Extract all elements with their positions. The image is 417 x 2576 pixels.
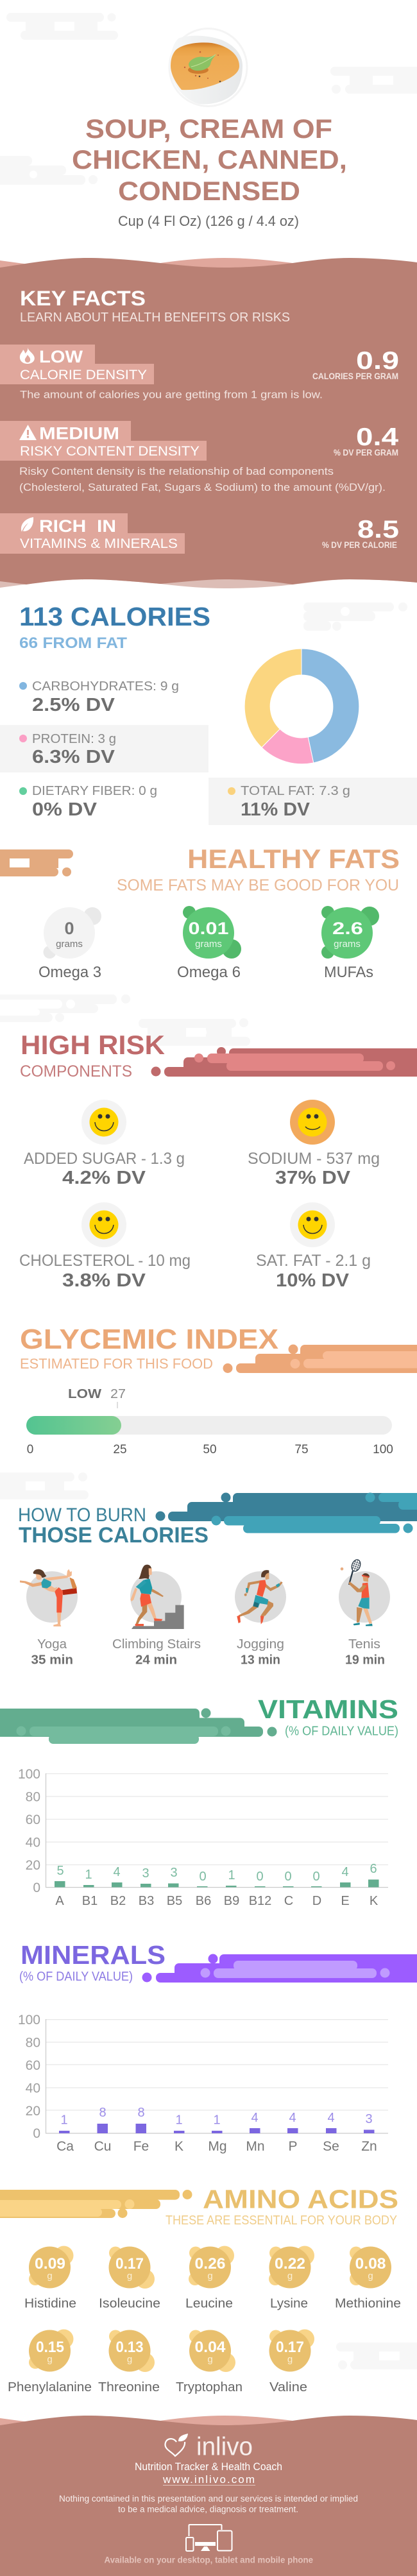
activity: tennis [339,1558,390,1667]
amino acid: methionine: Methionine [335,2297,401,2311]
fat: MUFAs [321,906,379,981]
minerals heading: (% OF DAILY VALUE) [19,1970,133,1984]
value labels: 0 [199,1870,207,1884]
icon: tennis figure [341,1558,373,1626]
amino acid: phenylalanine: 0.15 [36,2339,64,2356]
category labels: A [55,1894,64,1908]
icon: yoga figure [20,1569,77,1626]
logo: inlivo: inlivo [196,2433,253,2461]
amino acids heading [166,2184,398,2228]
category labels: Cu [94,2139,111,2154]
category labels: Mg [208,2139,227,2154]
y axis labels [18,2013,40,2141]
calories heading [19,602,210,652]
basil leaf [189,54,216,71]
minerals decoration [142,1954,417,1983]
value labels: 4 [341,1865,349,1879]
category labels: B2 [110,1894,126,1908]
amino acid: lysine [269,2246,314,2311]
macro: protein [19,732,116,767]
amino acid: histidine: Histidine [24,2297,76,2311]
category labels: B1 [82,1894,98,1908]
glycemic index gauge [26,1387,393,1456]
glycemic index gauge: 50 [203,1443,217,1456]
amino acid: methionine: 0.08 [355,2255,386,2273]
icon: smiley [90,1210,118,1240]
fact: medium risky content density: RISKY CONTENT DENSITY [20,444,200,459]
fat: omega 6: Omega 6 [177,964,241,981]
category labels: C [284,1894,293,1908]
icon: devices [186,2525,232,2551]
amino acids decoration [0,2190,192,2218]
footer fill [0,2416,417,2576]
macro: dietary fiber: DIETARY FIBER: 0 g [32,784,157,798]
macro: protein: 6.3% DV [32,747,115,767]
donut chart [244,649,359,764]
activity: climbing stairs: Climbing Stairs [112,1637,201,1651]
category labels: Zn [361,2139,377,2154]
fact: low calorie density: CALORIE DENSITY [20,368,147,382]
activity: climbing stairs [112,1565,201,1667]
amino acid: histidine: 0.09 [35,2255,65,2273]
amino acid: tryptophan: 0.04 [195,2339,226,2356]
amino acid: threonine: g [127,2354,132,2365]
vitamins heading: VITAMINS [258,1694,398,1724]
amino acid: tryptophan [176,2330,243,2394]
fact: low calorie density: CALORIES PER GRAM [312,371,398,381]
value labels: 8 [137,2106,145,2120]
activity: yoga: Yoga [37,1637,67,1651]
category labels: B9 [224,1894,239,1908]
amino acid: threonine [98,2330,160,2394]
value labels: 3 [142,1866,149,1881]
activity: jogging [235,1570,286,1667]
amino acid: isoleucine [99,2247,160,2311]
macro: total fat [228,784,350,820]
value labels: 4 [327,2111,335,2125]
key facts heading [20,287,290,325]
bars [59,2124,375,2133]
y axis labels: 100 [18,2013,40,2027]
key facts heading: KEY FACTS [20,287,146,310]
fact: rich in vitamins and minerals [0,513,399,554]
disclaimer [59,2494,358,2514]
amino acid: valine [269,2329,314,2394]
value labels: 1 [175,2113,183,2128]
amino acid: lysine: Lysine [270,2297,308,2311]
tagline: Nutrition Tracker & Health Coach [135,2461,282,2473]
minerals heading: MINERALS [21,1940,166,1970]
category labels: B6 [196,1894,211,1908]
risk: cholesterol: 3.8% DV [62,1270,146,1291]
activity: jogging: Jogging [237,1637,284,1651]
glycemic index gauge: 75 [294,1443,309,1456]
icon: smiley [90,1107,118,1137]
logo: inlivo [165,2433,253,2461]
glycemic index gauge: 25 [113,1443,127,1456]
glycemic index heading: ESTIMATED FOR THIS FOOD [20,1356,213,1372]
category labels: B3 [139,1894,154,1908]
y axis labels [18,1767,40,1895]
icon: smiley [298,1107,327,1137]
macro: total fat: TOTAL FAT: 7.3 g [241,784,350,798]
category labels: E [341,1894,350,1908]
amino acid: phenylalanine: Phenylalanine [8,2380,92,2394]
value labels: 0 [312,1870,320,1884]
activity: climbing stairs: 24 min [135,1653,177,1667]
icon: stairs figure [130,1565,184,1629]
icon: leaf [21,517,33,532]
value labels: 1 [85,1868,92,1882]
amino acid: isoleucine: Isoleucine [99,2297,160,2311]
high risk decoration [151,1047,417,1077]
healthy fats heading: SOME FATS MAY BE GOOD FOR YOU [117,876,399,894]
fact: low calorie density: LOW [39,347,83,366]
value labels: 1 [60,2113,68,2128]
fat: omega 3: 0 [64,919,74,938]
high risk heading: HIGH RISK [21,1030,165,1060]
category labels: Se [323,2139,339,2154]
serving size: Cup (4 Fl Oz) (126 g / 4.4 oz) [118,213,299,229]
fact: medium risky content density: 0.4 [356,423,398,451]
title [72,114,347,206]
fact: rich in vitamins and minerals: RICH IN [39,516,116,536]
fact: medium risky content density: Risky Content density is the relationship of bad components [19,465,334,477]
soup surface [171,42,239,90]
amino acid: valine: 0.17 [276,2339,304,2356]
value labels: 8 [99,2106,106,2120]
risk: cholesterol [19,1202,191,1291]
fact: low calorie density: The amount of calories you are getting from 1 gram is low. [20,389,323,400]
value labels: 5 [56,1864,64,1878]
y axis labels: 80 [26,1790,40,1804]
high risk heading [20,1030,165,1080]
category labels: D [312,1894,321,1908]
y axis labels: 0 [33,2126,40,2141]
category labels [56,2139,377,2154]
y axis labels: 100 [18,1767,40,1782]
y axis labels: 40 [26,2081,40,2095]
risk: sodium: SODIUM - 537 mg [248,1150,380,1168]
bowl body [170,36,243,104]
bar chart: minerals [18,2013,388,2154]
high risk heading: COMPONENTS [20,1062,132,1080]
macro: carbohydrates [19,679,179,715]
healthy fats decoration [0,849,73,876]
disclaimer: to be a medical advice, diagnosis or treatment. [118,2505,298,2514]
activity: tennis: Tenis [348,1637,380,1651]
amino acid: leucine: 0.26 [195,2255,226,2273]
fat: MUFAs: 2.6 [332,919,363,938]
category labels: Fe [133,2139,149,2154]
risk: sodium: 37% DV [275,1168,351,1188]
fat: MUFAs: grams [334,939,361,950]
bar chart: vitamins [18,1767,388,1908]
value labels [60,2106,373,2128]
fact: rich in vitamins and minerals: 8.5 [357,516,399,543]
risk: added sugar: 4.2% DV [62,1168,146,1188]
soup bowl photo [169,28,247,107]
value labels: 4 [289,2111,296,2125]
macro: carbohydrates: 2.5% DV [32,695,115,715]
amino acids heading: THESE ARE ESSENTIAL FOR YOUR BODY [166,2213,397,2228]
category labels: K [174,2139,183,2154]
glycemic index decoration [223,1345,417,1373]
panel fill [0,258,417,584]
glycemic index gauge: 0 [27,1443,33,1456]
fact: rich in vitamins and minerals: % DV PER CALORIE [322,540,397,550]
amino acid: leucine: g [207,2271,213,2282]
disclaimer: Nothing contained in this presentation and our services is intended or implied [59,2494,358,2503]
icon: flame [20,347,35,364]
activity: jogging: 13 min [241,1653,280,1667]
key facts heading: LEARN ABOUT HEALTH BENEFITS OR RISKS [20,311,290,325]
category labels: P [288,2139,298,2154]
activity: tennis: 19 min [345,1653,385,1667]
top pale wave [0,258,293,276]
glycemic index gauge: 27 [110,1387,126,1401]
amino acid: valine: g [287,2354,293,2365]
fat: omega 6: grams [195,939,222,950]
fact: medium risky content density: (Cholesterol, Saturated Fat, Sugars & Sodium) to the amount (%DV/gr). [19,481,386,493]
risk: added sugar [24,1100,185,1188]
fact: medium risky content density: MEDIUM [39,423,119,443]
glycemic index gauge: LOW [68,1387,101,1401]
amino acid: histidine: g [47,2271,53,2282]
amino acid: threonine: 0.13 [115,2339,144,2356]
value labels: 3 [170,1866,178,1880]
fat: omega 3: Omega 3 [38,964,101,981]
amino acid: valine: Valine [269,2380,307,2394]
macro: total fat: 11% DV [241,799,311,820]
y axis labels: 40 [26,1835,40,1850]
fact: low calorie density [0,345,399,400]
risk: cholesterol: CHOLESTEROL - 10 mg [19,1252,191,1270]
y axis labels: 0 [33,1881,40,1895]
fact: medium risky content density [0,421,398,493]
value labels: 6 [370,1862,377,1876]
glycemic index heading: GLYCEMIC INDEX [20,1324,278,1355]
icon: jogging figure [237,1570,283,1625]
value labels: 0 [256,1870,264,1884]
macro: carbohydrates: CARBOHYDRATES: 9 g [32,679,179,694]
burn calories heading: THOSE CALORIES [19,1523,208,1548]
risk: saturated fat: 10% DV [276,1270,350,1291]
y axis labels: 80 [26,2035,40,2051]
panel: key facts [0,258,417,588]
burn calories decoration [155,1492,417,1533]
fact: low calorie density: 0.9 [356,347,399,375]
amino acid: leucine: Leucine [185,2297,233,2311]
fat: omega 6 [177,906,241,981]
icon: smiley [298,1210,327,1240]
risk: saturated fat [256,1202,371,1291]
title: CHICKEN, CANNED, [72,144,347,175]
availability note: Available on your desktop, tablet and mobile phone [104,2555,313,2565]
category labels: Mn [246,2139,265,2154]
calories heading: 66 FROM FAT [19,635,127,652]
vitamins heading [258,1694,398,1739]
y axis labels: 60 [26,2058,40,2073]
burn calories heading: HOW TO BURN [18,1505,146,1526]
footer pale wave [0,2416,293,2434]
amino acid: lysine: 0.22 [275,2255,305,2273]
value labels: 1 [213,2113,221,2128]
vitamins heading: (% OF DAILY VALUE) [285,1725,398,1739]
risk: added sugar: ADDED SUGAR - 1.3 g [24,1150,185,1168]
amino acid: histidine [24,2246,76,2311]
glycemic index heading [20,1324,278,1372]
burn calories heading [18,1505,208,1548]
spices [184,51,219,79]
glycemic index gauge: 100 [373,1443,393,1456]
amino acid: methionine: g [368,2271,373,2282]
risk: saturated fat: SAT. FAT - 2.1 g [256,1252,371,1270]
healthy fats heading [117,844,400,894]
category labels [55,1894,379,1908]
value labels: 4 [251,2111,259,2125]
activity: yoga [20,1569,78,1667]
value labels: 0 [284,1870,292,1884]
title: SOUP, CREAM OF [85,114,332,144]
sauce swirl [188,66,208,74]
amino acid: phenylalanine [8,2329,92,2394]
vitamins decoration [0,1708,277,1744]
minerals heading [19,1940,166,1984]
y axis labels: 20 [26,2104,40,2119]
amino acid: isoleucine: 0.17 [115,2255,144,2273]
amino acid: isoleucine: g [127,2271,132,2282]
amino acids heading: AMINO ACIDS [203,2184,398,2213]
activity: yoga: 35 min [31,1653,73,1667]
healthy fats heading: HEALTHY FATS [187,844,400,874]
macro panel bands [0,725,417,825]
bottom pale wave [0,565,417,588]
fat: MUFAs: MUFAs [324,964,373,981]
risk: sodium [248,1100,380,1188]
website link: www.inlivo.com [162,2473,255,2486]
value labels: 3 [365,2112,373,2126]
category labels: B5 [167,1894,182,1908]
amino acid: methionine [335,2247,401,2311]
macro: dietary fiber: 0% DV [32,799,98,820]
category labels: B12 [249,1894,271,1908]
fact: rich in vitamins and minerals: VITAMINS & MINERALS [20,536,178,551]
y axis labels: 20 [26,1858,40,1873]
bars [55,1880,379,1888]
amino acid: tryptophan: g [207,2354,213,2365]
calories heading: 113 CALORIES [19,602,210,631]
fat: omega 3: grams [56,939,83,950]
fat: omega 3 [38,907,101,981]
footer [0,2416,417,2576]
amino acid: phenylalanine: g [47,2354,53,2365]
category labels: K [370,1894,379,1908]
macro: protein: PROTEIN: 3 g [32,732,116,746]
category labels: Ca [56,2139,74,2154]
y axis labels: 60 [26,1813,40,1827]
value labels: 4 [113,1865,121,1879]
icon: warning triangle [19,425,37,440]
value labels [56,1862,377,1884]
macro: dietary fiber [19,784,157,820]
amino acid: leucine [185,2246,234,2311]
fact: medium risky content density: % DV PER GRAM [334,448,398,457]
amino acid: tryptophan: Tryptophan [176,2380,243,2394]
amino acid: threonine: Threonine [98,2380,160,2394]
amino acid: lysine: g [287,2271,293,2282]
value labels: 1 [228,1868,235,1882]
fat: omega 6: 0.01 [189,919,228,938]
title: CONDENSED [118,176,300,206]
